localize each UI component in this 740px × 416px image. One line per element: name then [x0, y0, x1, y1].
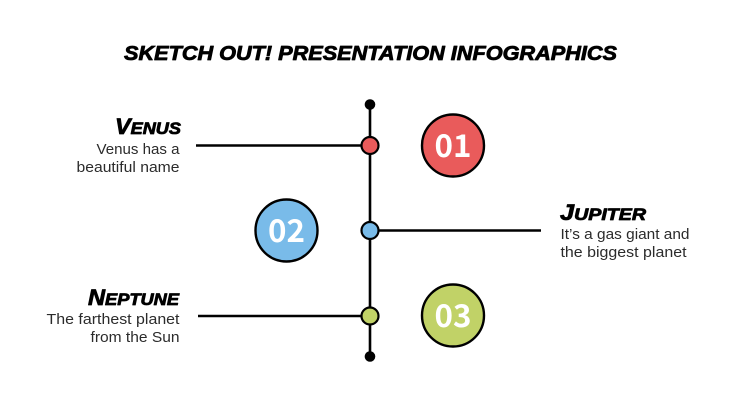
badge: 03	[422, 284, 484, 346]
text: Neptune description: from the Sun	[90, 330, 180, 346]
badge: 02	[256, 200, 318, 262]
node: red	[362, 137, 378, 154]
connector: Venus	[196, 144, 370, 147]
badge: 01	[422, 114, 484, 176]
timeline axis	[365, 99, 375, 362]
text: Venus description: beautiful name	[76, 160, 180, 176]
connector: Jupiter	[370, 229, 541, 232]
connector: Neptune	[198, 315, 370, 317]
heading: Jupiter: JUPITER	[560, 200, 647, 225]
item: Jupiter	[256, 200, 690, 262]
text: Venus description: Venus has a	[96, 142, 180, 158]
text: Neptune description: The farthest planet	[46, 312, 180, 328]
title: SKETCH OUT! PRESENTATION INFOGRAPHICS	[124, 43, 618, 65]
node: blue	[362, 222, 378, 239]
heading: Venus: VENUS	[115, 114, 182, 139]
text: Jupiter description: the biggest planet	[560, 245, 686, 261]
text: Jupiter description: It’s a gas giant and	[560, 227, 690, 243]
heading: Neptune: NEPTUNE	[88, 285, 180, 310]
badge: 01: 01	[434, 121, 472, 166]
node: green	[362, 308, 378, 324]
item: Venus	[76, 114, 484, 176]
badge: 02: 02	[268, 206, 305, 251]
badge: 03: 03	[434, 291, 472, 336]
item: Neptune	[46, 284, 484, 346]
